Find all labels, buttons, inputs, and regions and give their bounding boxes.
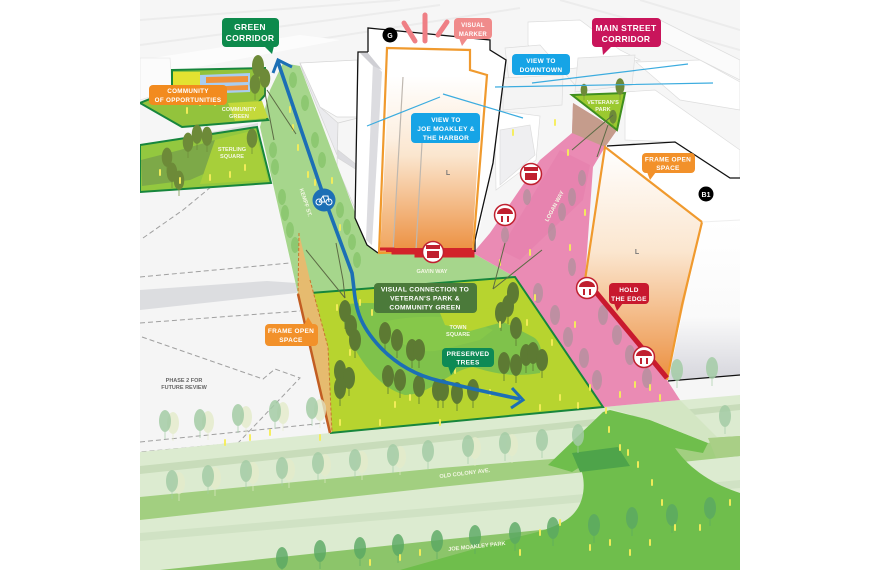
building B1 — [585, 142, 740, 381]
callout: frame open space left — [265, 317, 318, 346]
place labels: OLD COLONY AVE. — [439, 468, 491, 480]
callout: community of opportunities: OF OPPORTUNITIES — [155, 97, 221, 104]
callout: frame open space top: FRAME OPEN — [645, 156, 691, 164]
frame open space strip — [298, 233, 332, 433]
lower right tree strip — [708, 436, 740, 458]
icon: B1 circle — [698, 186, 714, 202]
icon: G circle — [382, 28, 398, 42]
callout: preserved trees: PRESERVED — [447, 351, 489, 358]
place labels: PARK — [595, 107, 611, 113]
callout: hold the edge: THE EDGE — [611, 296, 647, 303]
icon: market 2 — [520, 164, 542, 184]
L labels: L — [446, 170, 451, 177]
callout: view to Joe Moakley — [411, 113, 480, 143]
central building L — [355, 28, 506, 256]
callout: visual connection: COMMUNITY GREEN — [389, 304, 461, 312]
place labels: SQUARE — [220, 154, 244, 160]
callout: main street corridor: MAIN STREET — [596, 23, 657, 33]
callout: main street corridor: CORRIDOR — [602, 34, 650, 44]
callout: visual marker — [454, 18, 492, 46]
icon: umbrella 1 — [494, 204, 516, 226]
connection arrows — [265, 90, 613, 298]
background buildings right — [495, 20, 740, 190]
callout: view to downtown: VIEW TO — [526, 58, 556, 65]
place labels: PHASE 2 FOR — [166, 378, 202, 384]
callout: preserved trees: TREES — [456, 360, 480, 366]
Logan Way main street — [473, 103, 680, 407]
icon: market 1 — [422, 242, 444, 262]
Town Square lawn — [298, 277, 603, 433]
L labels: L — [635, 249, 640, 256]
callout: main street corridor — [592, 18, 661, 55]
place labels: JOE MOAKLEY PARK — [448, 541, 506, 553]
L labels — [446, 170, 640, 256]
park trees — [276, 497, 716, 570]
callout: hold the edge: HOLD — [619, 287, 639, 294]
place labels: TOWN — [450, 325, 466, 331]
icon: G circle: G — [387, 33, 393, 40]
callout: green corridor — [222, 18, 279, 54]
place labels: VETERAN'S — [587, 100, 619, 106]
callout: visual connection: VETERAN'S PARK & — [390, 296, 460, 302]
lower park and road bands — [140, 395, 740, 570]
callout: hold the edge — [609, 283, 649, 311]
entry arrow shadow — [572, 447, 630, 472]
Community Green lawn — [140, 68, 268, 127]
callout: green corridor: GREEN — [234, 22, 266, 32]
phase 2 lot — [140, 123, 330, 452]
icon: bike — [312, 188, 336, 212]
place labels — [161, 100, 619, 553]
place labels: SQUARE — [446, 332, 470, 338]
callout: community of opportunities: COMMUNITY — [167, 88, 209, 95]
place labels: STERLING — [218, 147, 246, 153]
Kempf street side buildings — [300, 60, 358, 213]
place labels: FUTURE REVIEW — [161, 385, 208, 391]
callout: visual marker: MARKER — [459, 32, 487, 38]
background site plan — [140, 0, 740, 400]
callout: frame open space top: SPACE — [656, 165, 680, 172]
Kempf street corridor — [260, 63, 515, 294]
place labels: KEMPF ST. — [298, 188, 312, 218]
pedestrian crossing — [604, 400, 720, 443]
icon: B1 circle: B1 — [702, 192, 711, 199]
place labels: COMMUNITY — [222, 107, 257, 113]
faint trees — [159, 357, 731, 499]
icon: umbrella 2 — [576, 278, 598, 298]
yellow pedestrian markers — [160, 100, 730, 565]
place labels: LOGAN WAY — [544, 190, 566, 223]
big green entry arrow — [400, 410, 740, 570]
view lines — [367, 64, 713, 126]
callout: view to downtown — [512, 54, 570, 75]
corridor green path — [273, 60, 523, 408]
callout: view to Joe Moakley: THE HARBOR — [423, 135, 469, 142]
Sterling Square lawn — [140, 127, 271, 192]
Veteran's Park — [572, 93, 625, 130]
faint companion trees — [167, 399, 518, 501]
callout: green corridor: CORRIDOR — [226, 33, 274, 43]
callout: frame open space left: SPACE — [279, 337, 303, 344]
callout: visual marker: VISUAL — [461, 23, 485, 29]
callout: view to downtown: DOWNTOWN — [520, 67, 562, 74]
callout: visual connection — [374, 283, 477, 313]
callout: preserved trees — [442, 348, 494, 375]
callout: community of opportunities — [149, 85, 227, 105]
callout: frame open space top — [642, 153, 695, 180]
community and veterans trees — [162, 55, 624, 196]
place labels: GAVIN WAY — [416, 269, 448, 275]
icon: umbrella 3 — [634, 346, 654, 368]
town square trees — [334, 282, 548, 411]
place labels: GREEN — [229, 114, 249, 120]
callout: view to Joe Moakley: JOE MOAKLEY & — [417, 126, 475, 133]
callout: view to Joe Moakley: VIEW TO — [431, 117, 461, 124]
sunburst visual marker — [404, 15, 447, 41]
callout: visual connection: VISUAL CONNECTION TO — [381, 286, 469, 294]
callout: frame open space left: FRAME OPEN — [268, 328, 314, 335]
